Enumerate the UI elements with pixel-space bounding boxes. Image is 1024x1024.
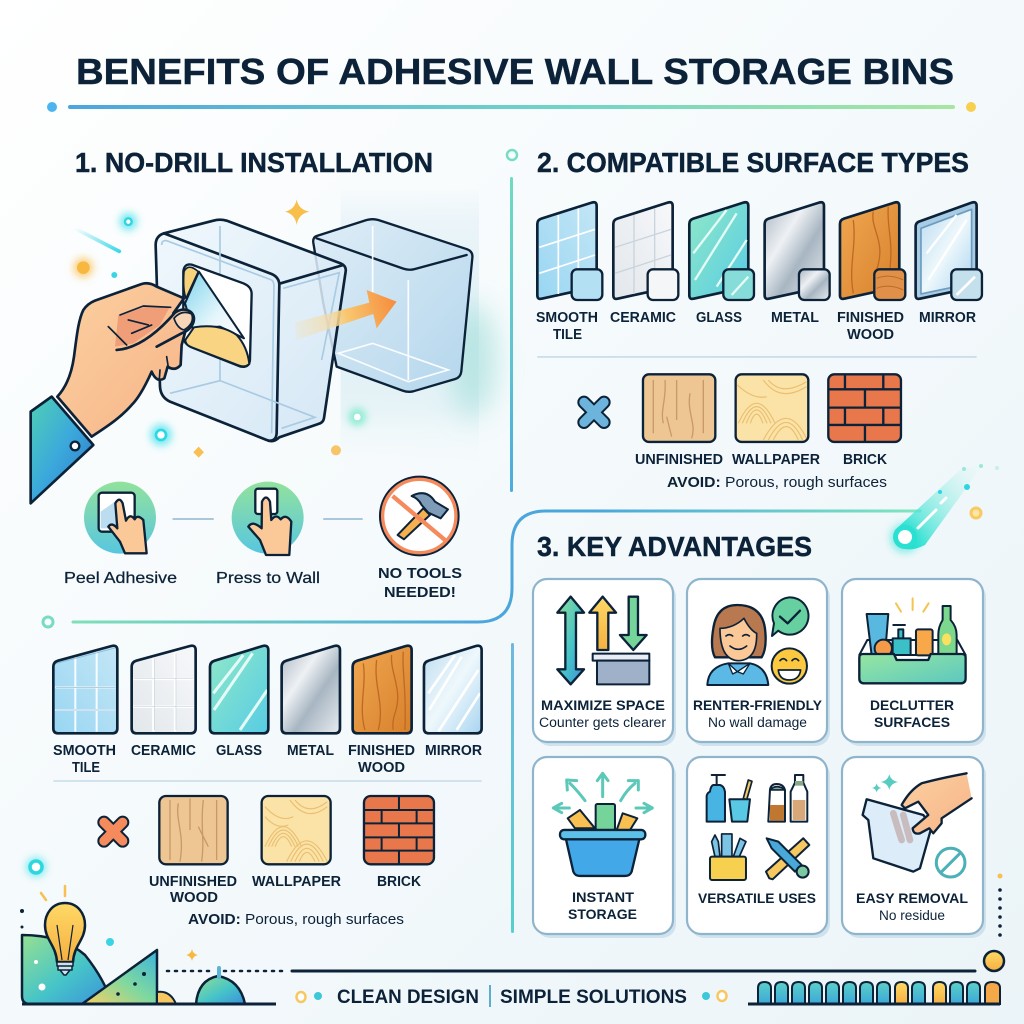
card: declutter surfaces: DECLUTTER xyxy=(870,697,954,713)
label: no tools needed: NEEDED! xyxy=(384,584,456,601)
divider xyxy=(537,355,977,359)
swatch: brick xyxy=(364,796,434,864)
labels: right surfaces: WOOD xyxy=(847,327,894,343)
surface: glass xyxy=(210,646,268,733)
labels: left surfaces: FINISHED xyxy=(348,743,415,759)
labels: right surfaces: CERAMIC xyxy=(610,310,677,326)
peeling adhesive patch xyxy=(183,264,252,367)
surface: metal xyxy=(282,646,340,733)
labels: right surfaces: MIRROR xyxy=(919,310,977,326)
icon: no tools hammer xyxy=(380,477,459,555)
swatch: brick xyxy=(828,374,901,442)
footer landscape with light bulb xyxy=(20,857,284,1004)
surface: glass xyxy=(689,202,754,300)
card: maximize space xyxy=(533,579,676,746)
labels: right surfaces: TILE xyxy=(553,327,582,343)
right bin xyxy=(313,219,472,392)
labels: right surfaces: BRICK xyxy=(843,452,887,468)
avoid note: right: AVOID: Porous, rough surfaces xyxy=(667,474,887,491)
swatch: unfinished xyxy=(643,374,715,442)
panel: no-drill illustration xyxy=(31,190,497,503)
label: no tools needed: NO TOOLS xyxy=(378,565,462,582)
card: renter-friendly: No wall damage xyxy=(708,715,807,730)
labels: left surfaces: WALLPAPER xyxy=(252,874,342,890)
card: easy removal: No residue xyxy=(879,908,945,923)
panel: key advantages cards xyxy=(533,579,986,938)
icon: orange x xyxy=(104,822,123,841)
surfaces: left compatible swatches xyxy=(53,646,482,864)
labels: left surfaces: BRICK xyxy=(377,874,421,890)
orange arrow xyxy=(295,290,397,340)
labels: left surfaces: WOOD xyxy=(358,760,405,776)
surfaces: right compatible swatches xyxy=(537,202,982,442)
card: versatile uses xyxy=(687,757,830,938)
dotted column decoration xyxy=(998,874,1002,937)
labels: right surfaces xyxy=(536,310,977,468)
surface: ceramic xyxy=(613,202,678,300)
labels: right surfaces: UNFINISHED xyxy=(635,452,723,468)
card: easy removal xyxy=(842,757,986,938)
heading: section 1: 1. NO-DRILL INSTALLATION xyxy=(75,147,433,178)
surface: mirror xyxy=(916,202,982,300)
surface: finished wood xyxy=(353,646,412,733)
card: maximize space: Counter gets clearer xyxy=(539,715,667,730)
labels: right surfaces: FINISHED xyxy=(837,310,904,326)
surface: metal xyxy=(765,202,830,300)
labels: left surfaces xyxy=(53,743,483,906)
heading: section 3: 3. KEY ADVANTAGES xyxy=(537,531,812,562)
step connectors xyxy=(173,516,362,522)
labels: left surfaces: SMOOTH xyxy=(53,743,116,759)
icon: blue x xyxy=(584,402,604,422)
divider xyxy=(53,779,482,783)
card: instant storage xyxy=(533,757,676,938)
swatch: unfinished wood xyxy=(159,796,228,864)
steps row xyxy=(84,477,459,555)
labels: left surfaces: UNFINISHED xyxy=(149,874,237,890)
surface: finished wood xyxy=(840,202,905,300)
card: declutter surfaces: SURFACES xyxy=(874,714,950,730)
labels: left surfaces: METAL xyxy=(287,743,334,759)
title: BENEFITS OF ADHESIVE WALL STORAGE BINS xyxy=(76,51,954,92)
card: maximize space: MAXIMIZE SPACE xyxy=(541,697,665,713)
labels: left surfaces: CERAMIC xyxy=(131,743,197,759)
swatch: wallpaper xyxy=(262,796,331,864)
label: press to wall: Press to Wall xyxy=(216,570,320,587)
sparkles and glowing dots xyxy=(73,199,366,458)
hand peeling the adhesive xyxy=(31,283,194,503)
card: instant storage: STORAGE xyxy=(568,906,637,922)
card: renter-friendly xyxy=(687,579,830,746)
step icon: press to wall xyxy=(232,482,304,555)
heading: section 2: 2. COMPATIBLE SURFACE TYPES xyxy=(537,147,969,178)
footer rule xyxy=(292,951,1004,971)
footer bar pattern xyxy=(748,982,1000,1004)
labels: right surfaces: METAL xyxy=(771,310,819,326)
comet decoration xyxy=(890,462,999,553)
footer tagline: CLEAN DESIGN xyxy=(337,987,479,1008)
avoid note: left: AVOID: Porous, rough surfaces xyxy=(188,911,404,928)
card: renter-friendly: RENTER-FRIENDLY xyxy=(693,697,823,713)
labels: left surfaces: TILE xyxy=(72,760,100,776)
labels: left surfaces: MIRROR xyxy=(425,743,483,759)
footer tagline: SIMPLE SOLUTIONS xyxy=(500,987,687,1008)
label: no tools needed xyxy=(378,565,462,601)
title rule xyxy=(47,102,976,112)
surface: smooth tile xyxy=(537,202,602,300)
card: versatile uses: VERSATILE USES xyxy=(698,890,816,906)
labels: right surfaces: SMOOTH xyxy=(536,310,598,326)
labels: right surfaces: GLASS xyxy=(696,310,742,326)
labels: left surfaces: WOOD xyxy=(170,890,218,906)
front bin xyxy=(156,220,346,441)
surface: ceramic xyxy=(132,646,196,733)
step icon: peel adhesive xyxy=(84,482,156,554)
labels: left surfaces: GLASS xyxy=(216,743,262,759)
swatch: wallpaper xyxy=(736,374,808,442)
label: peel adhesive: Peel Adhesive xyxy=(64,570,177,587)
footer tagline xyxy=(296,985,726,1008)
section connector lines xyxy=(43,150,920,933)
labels: right surfaces: WALLPAPER xyxy=(732,452,821,468)
surface: smooth tile xyxy=(53,646,117,733)
surface: mirror xyxy=(424,646,482,733)
card: instant storage: INSTANT xyxy=(572,889,634,905)
card: declutter surfaces xyxy=(842,579,986,746)
card: easy removal: EASY REMOVAL xyxy=(856,890,968,906)
